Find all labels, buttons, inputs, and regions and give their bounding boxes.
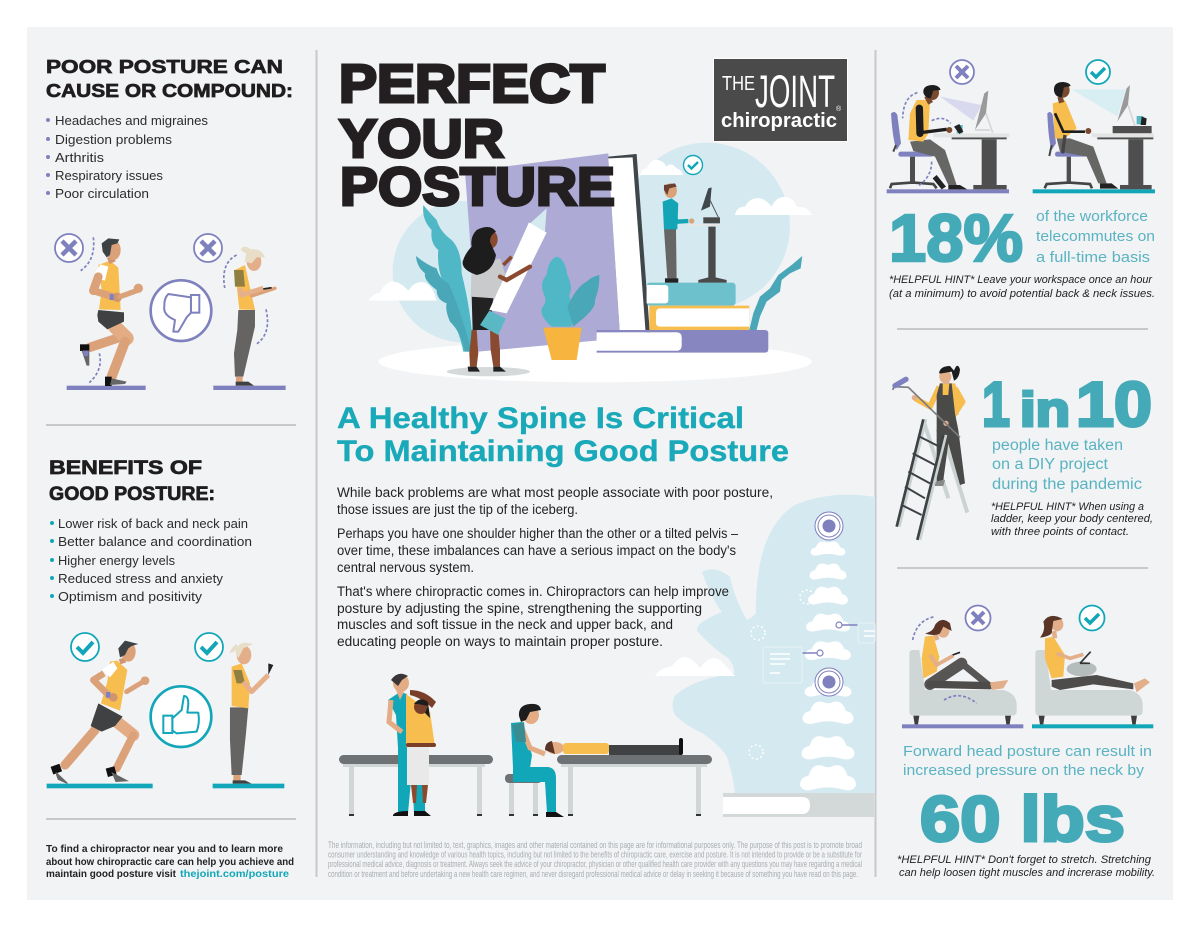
helpful hint: ladder: *HELPFUL HINT* When using a bbox=[991, 501, 1144, 513]
helpful hint: ladder: with three points of contact. bbox=[991, 526, 1129, 538]
stat description: workforce: of the workforce bbox=[1036, 208, 1148, 225]
body text: muscles and soft tissue in the neck and upper back, and bbox=[337, 617, 673, 632]
stat description: workforce: telecommutes on bbox=[1036, 228, 1155, 245]
icon: X badge desk bbox=[950, 60, 974, 84]
call to action text bbox=[46, 843, 294, 880]
icon: check badge couch bbox=[1080, 606, 1104, 630]
stat: 1 in 10 bbox=[982, 370, 1152, 440]
icon: thumbs up bbox=[151, 686, 211, 747]
helpful hint: workspace: *HELPFUL HINT* Leave your workspace once an hour bbox=[889, 274, 1153, 286]
list: problems caused by poor posture: Poor circulation bbox=[55, 186, 149, 201]
stat: 1 in 10: 10 bbox=[1076, 370, 1152, 440]
subheading bbox=[337, 402, 789, 468]
icon: check badge desk bbox=[1086, 60, 1110, 84]
heading: benefits of good posture bbox=[49, 458, 215, 505]
list: problems caused by poor posture: Arthritis bbox=[55, 150, 105, 165]
body text: posture by adjusting the spine, strengthening the supporting bbox=[337, 601, 702, 616]
list: benefits bbox=[50, 516, 252, 604]
illustration: chiropractors and patients at tables bbox=[339, 674, 712, 817]
stat description: forward head posture: Forward head posture can result in bbox=[903, 743, 1152, 760]
title bbox=[339, 54, 615, 217]
call to action text: thejoint.com/posture bbox=[180, 868, 289, 880]
hero illustration bbox=[368, 143, 812, 382]
helpful hint: workspace bbox=[889, 274, 1155, 300]
logo: The Joint Chiropractic: chiropractic bbox=[721, 110, 837, 132]
stat description: DIY: people have taken bbox=[992, 437, 1123, 454]
stat description: DIY bbox=[992, 437, 1142, 493]
call to action text: about how chiropractic care can help you achieve and bbox=[46, 856, 294, 868]
disclaimer bbox=[328, 840, 862, 880]
icon: check badge above standing desk bbox=[684, 156, 702, 174]
panel: left column bbox=[46, 56, 294, 880]
body text: Perhaps you have one shoulder higher than the other or a tilted pelvis – bbox=[337, 526, 738, 541]
illustration: spine bbox=[655, 495, 875, 817]
icon: X badge couch bbox=[966, 606, 990, 630]
panel: center column bbox=[328, 54, 875, 880]
icon: check badge runner bbox=[71, 633, 99, 661]
logo: The Joint Chiropractic: ® bbox=[836, 105, 842, 113]
logo: The Joint Chiropractic bbox=[713, 58, 848, 142]
list: benefits: Reduced stress and anxiety bbox=[58, 571, 224, 586]
stat: 1 in 10: in bbox=[1020, 384, 1070, 437]
list: problems caused by poor posture bbox=[46, 113, 208, 201]
subheading: To Maintaining Good Posture bbox=[337, 435, 789, 468]
disclaimer: condition or treatment and before undertaking a new health care regimen, and never disregard professional medical advice or delay in seeking it because of something you have read on this page. bbox=[328, 869, 858, 880]
body text: While back problems are what most people associate with poor posture, bbox=[337, 485, 773, 500]
title: POSTURE bbox=[340, 157, 615, 217]
list: benefits: Better balance and coordination bbox=[58, 534, 252, 549]
body text: educating people on ways to maintain proper posture. bbox=[337, 634, 663, 649]
list: problems caused by poor posture: Respiratory issues bbox=[55, 168, 163, 183]
body text: over time, these imbalances can have a serious impact on the body's bbox=[337, 543, 736, 558]
list: problems caused by poor posture: Digestion problems bbox=[55, 132, 173, 147]
icon: thumbs down bbox=[151, 280, 211, 341]
body text: That's where chiropractic comes in. Chiropractors can help improve bbox=[337, 584, 729, 599]
helpful hint: stretching: *HELPFUL HINT* Don't forget to stretch. Stretching bbox=[897, 854, 1152, 866]
list: benefits: Optimism and positivity bbox=[58, 589, 203, 604]
icon: X badge runner bbox=[55, 234, 83, 262]
disclaimer: The information, including but not limited to, text, graphics, images and other material contained on this page are for informational purposes only. The purpose of this post is to promote broad bbox=[328, 840, 862, 851]
logo: The Joint Chiropractic: THE bbox=[722, 73, 755, 95]
title: PERFECT bbox=[339, 54, 605, 114]
heading: benefits of good posture: BENEFITS OF bbox=[49, 458, 202, 479]
stat description: workforce bbox=[1036, 208, 1155, 266]
heading: poor posture: CAUSE OR COMPOUND: bbox=[46, 80, 293, 101]
list: problems caused by poor posture: Headaches and migraines bbox=[55, 113, 208, 128]
illustration: good posture runner and woman bbox=[47, 641, 284, 788]
helpful hint: stretching bbox=[897, 854, 1155, 879]
body text: central nervous system. bbox=[337, 560, 474, 575]
body text bbox=[337, 485, 773, 649]
heading: benefits of good posture: GOOD POSTURE: bbox=[49, 484, 215, 505]
body text: those issues are just the tip of the iceberg. bbox=[337, 502, 578, 517]
helpful hint: ladder: ladder, keep your body centered, bbox=[991, 513, 1153, 525]
stat: 18 percent: 18% bbox=[889, 201, 1023, 276]
stat: 1 in 10: 1 bbox=[982, 370, 1010, 440]
list: benefits: Lower risk of back and neck pain bbox=[58, 516, 248, 531]
illustration: bad and good couch posture bbox=[902, 616, 1153, 728]
subheading: A Healthy Spine Is Critical bbox=[337, 402, 744, 435]
call to action text: maintain good posture visit bbox=[46, 868, 176, 880]
helpful hint: workspace: (at a minimum) to avoid potential back & neck issues. bbox=[889, 288, 1155, 300]
helpful hint: ladder bbox=[991, 501, 1153, 538]
icon: check badge woman bbox=[195, 633, 223, 661]
stat: 60 lbs: 60 lbs bbox=[920, 783, 1125, 855]
heading: poor posture: POOR POSTURE CAN bbox=[46, 56, 283, 77]
stat description: forward head posture bbox=[903, 743, 1152, 779]
logo: The Joint Chiropractic: JOINT bbox=[755, 66, 835, 117]
list: benefits: Higher energy levels bbox=[58, 553, 175, 568]
illustration: bad and good desk posture bbox=[887, 82, 1155, 193]
helpful hint: stretching: can help loosen tight muscles and increrase mobility. bbox=[899, 867, 1155, 879]
stat description: DIY: on a DIY project bbox=[992, 456, 1109, 473]
disclaimer: professional medical advice, diagnosis or treatment. Always seek the advice of your chiropractor, physician or other qualified health care provider with any questions you may have regarding a medical bbox=[328, 859, 862, 870]
icon: X badge woman bbox=[194, 234, 222, 262]
panel: right column bbox=[887, 60, 1155, 879]
stat description: workforce: a full-time basis bbox=[1036, 249, 1150, 266]
title: YOUR bbox=[339, 109, 504, 169]
stat description: forward head posture: increased pressure on the neck by bbox=[903, 762, 1145, 779]
disclaimer: consumer understanding and knowledge of various health topics, including but not limited to the benefits of chiropractic care, exercise and posture. It is not intended to provide or be a substitute for bbox=[328, 850, 862, 860]
illustration: bad posture runner and woman bbox=[67, 237, 286, 390]
heading: poor posture bbox=[46, 56, 293, 101]
stat description: DIY: during the pandemic bbox=[992, 476, 1142, 493]
call to action text: To find a chiropractor near you and to learn more bbox=[46, 843, 283, 855]
illustration: woman painting on ladder bbox=[893, 366, 967, 540]
